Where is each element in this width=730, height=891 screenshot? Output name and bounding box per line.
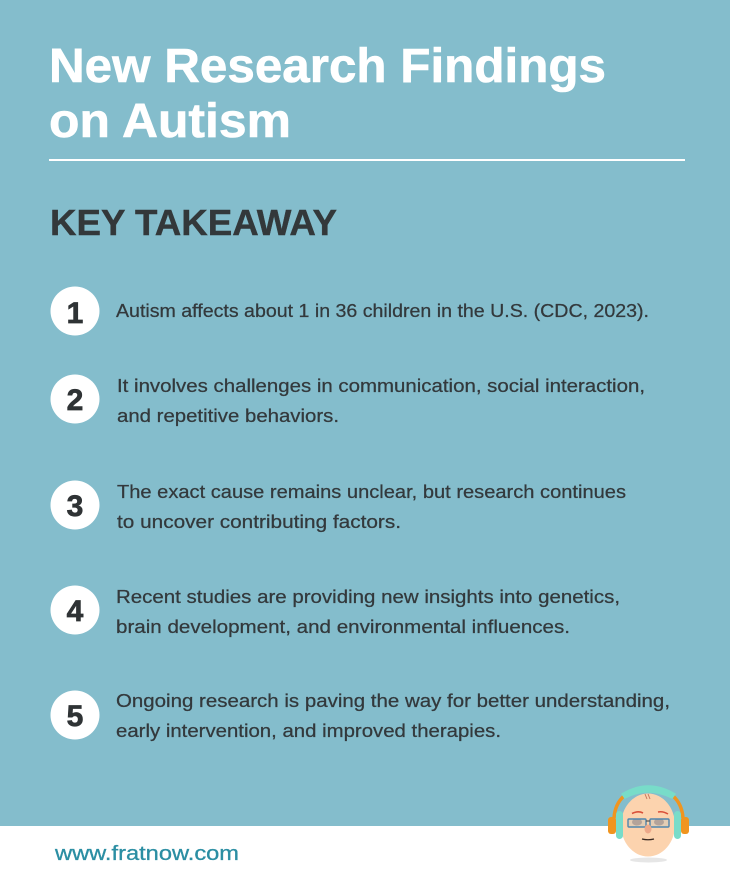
footer band — [0, 826, 730, 891]
takeaway 4: brain development, and environmental influences. — [116, 616, 570, 637]
takeaway 3: The exact cause remains unclear, but research continues — [117, 481, 626, 502]
title: New Research Findings — [49, 40, 606, 93]
takeaway 2: It involves challenges in communication, social interaction, — [117, 375, 645, 396]
title: on Autism — [49, 95, 291, 148]
takeaway 2 — [50, 374, 645, 426]
takeaway 5 — [50, 690, 670, 741]
footer url: www.fratnow.com — [54, 843, 239, 865]
takeaway 3 — [50, 480, 626, 532]
takeaway 5: early intervention, and improved therapies. — [116, 720, 501, 741]
takeaway 3: 3 — [67, 490, 83, 523]
takeaway 2: 2 — [67, 384, 83, 417]
takeaway 4: Recent studies are providing new insights into genetics, — [116, 586, 620, 607]
takeaway 5: 5 — [67, 700, 83, 733]
takeaway 3: to uncover contributing factors. — [117, 511, 401, 532]
takeaway 4: 4 — [67, 595, 84, 628]
takeaway 1: 1 — [67, 297, 83, 330]
title — [49, 40, 606, 148]
takeaway 1 — [50, 286, 649, 336]
icon: mascot with headphones — [608, 786, 689, 862]
takeaway 5: Ongoing research is paving the way for better understanding, — [116, 690, 670, 711]
takeaway 2: and repetitive behaviors. — [117, 405, 339, 426]
takeaway 1: Autism affects about 1 in 36 children in the U.S. (CDC, 2023). — [116, 300, 649, 321]
takeaway 4 — [50, 586, 620, 637]
heading: key takeaway: KEY TAKEAWAY — [50, 202, 337, 243]
